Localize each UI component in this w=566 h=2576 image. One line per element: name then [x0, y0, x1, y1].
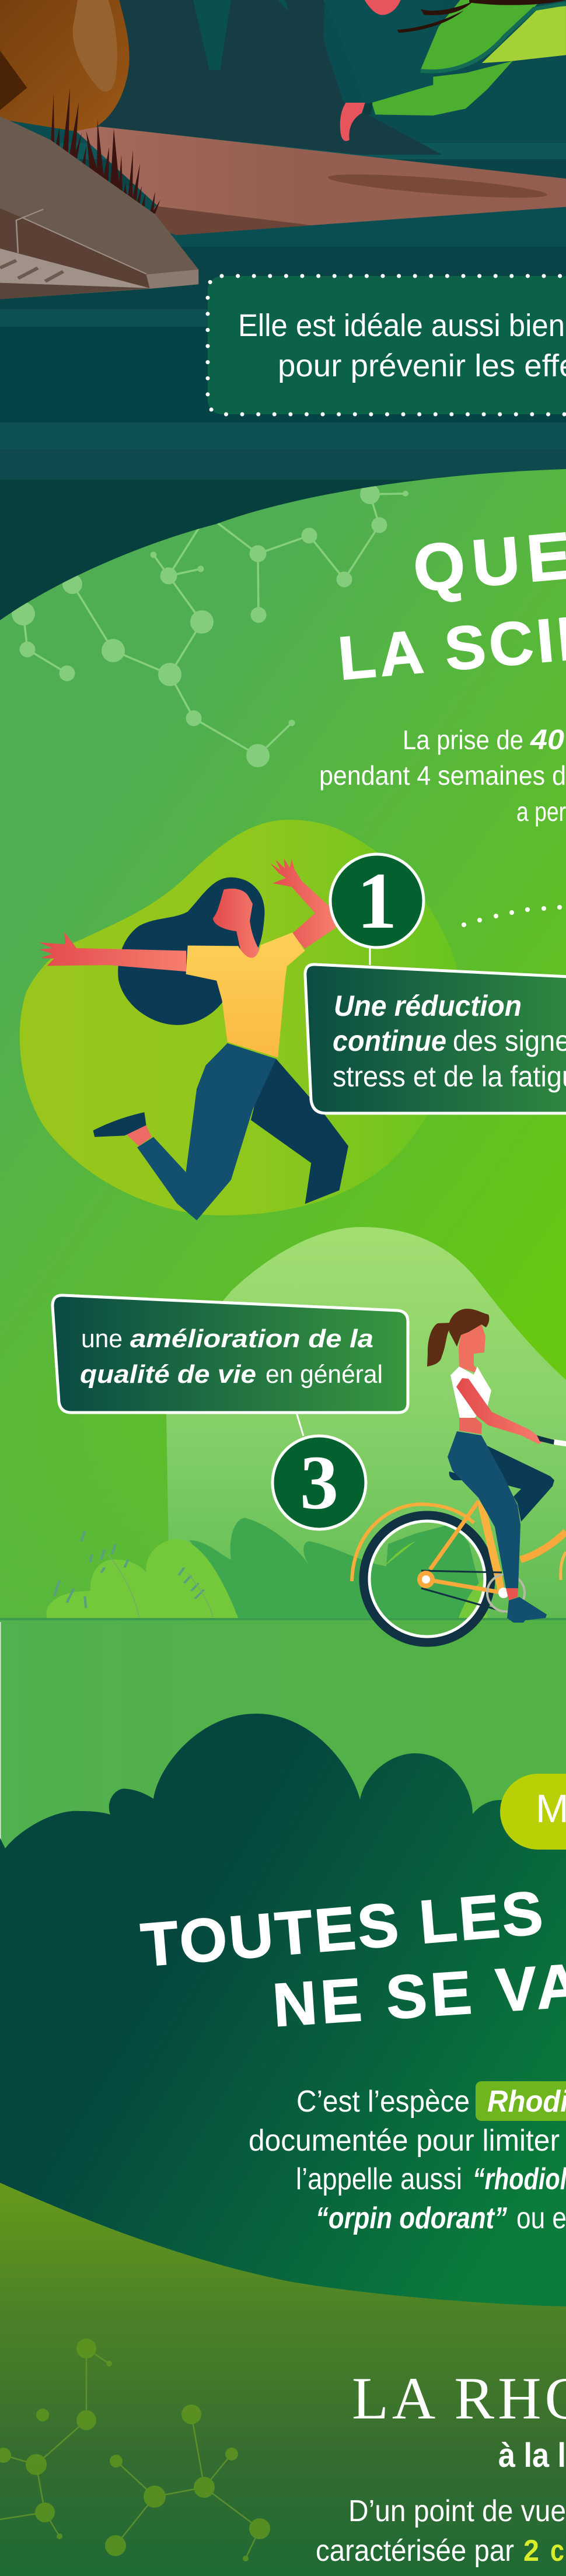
rock dark face: [0, 208, 150, 288]
intro text: study summary: La prise de: [403, 725, 523, 755]
rock: [0, 116, 198, 299]
decorative blob behind jumping woman: [20, 820, 461, 1215]
dark tree trunk: [99, 0, 442, 155]
runner: shoulder and leg: [323, 0, 441, 104]
back thigh: [487, 1446, 554, 1522]
heading: not all species equal: TOUTES LES: [138, 1879, 546, 1980]
callout 1: stress reduction: continue: [333, 1025, 446, 1057]
heading: science question: [336, 518, 566, 693]
rear hub: [417, 1571, 435, 1588]
runner: foot: [340, 103, 365, 141]
dark foliage: [190, 1518, 487, 1619]
dotted arc from badge 1: [462, 905, 562, 927]
pink ground path: [76, 127, 566, 225]
small blue-grey leaves: [54, 1531, 213, 1617]
number badge 3: 3: [300, 1439, 338, 1525]
frame stays: [430, 1501, 478, 1570]
body text: Rhodiola species: [249, 2081, 566, 2235]
inside wheel light leaves: [385, 1542, 487, 1619]
handlebar: [537, 1435, 554, 1445]
front fender: [561, 1552, 566, 1580]
shoe: [507, 1597, 547, 1623]
path shadow: [144, 206, 312, 235]
ankle: [506, 1588, 518, 1600]
light green arch behind cyclist: [166, 1227, 566, 1619]
callout 3: quality of life: qualité de vie: [80, 1360, 256, 1389]
puddle: [327, 170, 548, 202]
body text: chemical characterisation: 2: [523, 2534, 539, 2568]
front leg: [137, 1043, 276, 1220]
right arm and raised hand: [270, 858, 336, 949]
background bands: top forest scene: [0, 0, 566, 655]
molecule network: bottom left: [0, 2339, 270, 2561]
plants: bushes on ground: [46, 1518, 487, 1619]
saddle: [449, 1471, 467, 1480]
boulder highlight: [73, 0, 117, 92]
body text: chemical characterisation: caractérisée par: [316, 2534, 514, 2568]
chain and chainring: [421, 1571, 506, 1612]
pedal hub: [498, 1588, 509, 1598]
ground: [0, 1618, 566, 1853]
panel: dark tree silhouette section: [0, 1714, 566, 2306]
midriff: [459, 1418, 482, 1434]
body text: Rhodiola species: “orpin odorant”: [316, 2201, 507, 2235]
grass tuft: [51, 88, 160, 214]
callout 1: stress reduction: Une réduction: [334, 990, 522, 1022]
body text: Rhodiola species: l’appelle aussi: [296, 2162, 462, 2196]
panel: green science section background: [0, 469, 566, 1618]
shoe: [93, 1112, 146, 1137]
light foliage: [46, 1539, 238, 1619]
connector: number 1 to callout: [369, 946, 371, 965]
left edge white line: [0, 1622, 1, 1841]
callout 3: quality of life: amélioration de la: [130, 1324, 373, 1353]
rock light face: [0, 249, 150, 288]
body text: Rhodiola species: documentée pour limiter: [249, 2124, 560, 2158]
illustration: cyclist and bicycle: [352, 1309, 566, 1642]
body text: Rhodiola species: C’est l’espèce: [296, 2085, 470, 2119]
left arm: [39, 932, 186, 971]
tree leaf: [193, 0, 289, 70]
arm: [456, 1378, 544, 1444]
face and neck: [459, 1324, 485, 1375]
back leg: [251, 1059, 348, 1204]
yellow t-shirt: [186, 932, 305, 1057]
down tube: [520, 1532, 566, 1560]
callout 1: stress reduction: [305, 964, 566, 1113]
connector: callout to number 3: [296, 1413, 303, 1436]
runner: leg green: [372, 61, 512, 116]
rear fender: [352, 1504, 474, 1581]
intro text: study summary: [319, 725, 566, 827]
callout 3: quality of life: en général: [265, 1360, 383, 1389]
ankle: [127, 1126, 152, 1146]
hair: [118, 878, 264, 1025]
illustration: jumping woman: [39, 858, 348, 1220]
molecule network: top left: [12, 484, 408, 767]
white top: [450, 1366, 491, 1418]
panel: olive molecule section background: [0, 2159, 566, 2576]
callout: dotted message box: [208, 276, 566, 414]
intro text: study summary: 40: [530, 725, 564, 756]
runner: shorts green: [421, 0, 541, 70]
runner: hair strands: [397, 0, 566, 33]
callout 3: quality of life: [53, 1295, 408, 1413]
boulder facet: [0, 51, 27, 110]
number badge 3: [272, 1436, 366, 1529]
number badge 1: [330, 854, 424, 948]
front leg: [448, 1431, 520, 1588]
runner: shorts lime: [482, 6, 566, 63]
callout 3: quality of life: une: [81, 1324, 123, 1353]
pill label: [500, 1774, 566, 1850]
body text: chemical characterisation: [316, 2494, 566, 2568]
rear wheel: [364, 1515, 491, 1642]
face and neck: [213, 889, 263, 969]
seat tube: [478, 1500, 505, 1591]
hair: [449, 1309, 489, 1347]
scene illustration: tree, boulder, path and rock: [0, 0, 566, 299]
ponytail: [427, 1323, 450, 1366]
number badge 1: 1: [357, 856, 397, 945]
runner: hand: [365, 0, 401, 15]
heading: not all species equal: [138, 1879, 566, 2040]
brown boulder: [0, 0, 130, 132]
